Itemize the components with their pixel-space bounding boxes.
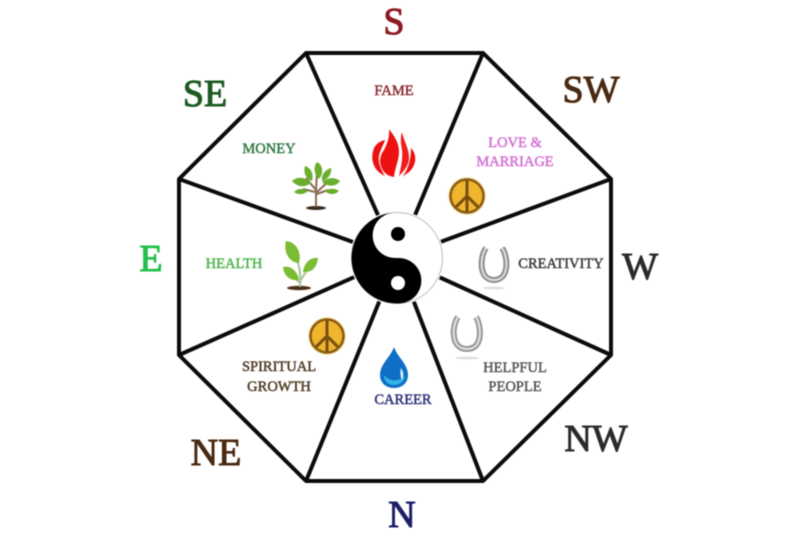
direction label: NW: NW (564, 418, 628, 460)
panel label: spiritual growth: GROWTH (247, 379, 311, 395)
panel label: helpful people: PEOPLE (488, 379, 542, 395)
yin yang symbol (348, 211, 444, 307)
panel label: love and marriage (476, 135, 554, 170)
icon: horseshoe right (482, 248, 506, 289)
direction label: W: W (622, 246, 658, 288)
direction label: E: E (139, 238, 163, 280)
direction label: SW: SW (562, 69, 620, 111)
direction label: SE: SE (183, 73, 227, 115)
icon: peace sign lower (308, 317, 346, 355)
panel label: spiritual growth (242, 359, 316, 395)
panel label: spiritual growth: SPIRITUAL (242, 359, 316, 375)
panel label: love and marriage: MARRIAGE (476, 154, 554, 170)
direction label: S: S (383, 1, 405, 43)
panel label: money: MONEY (242, 141, 296, 157)
panel label: fame: FAME (374, 83, 414, 99)
icon: horseshoe lower (454, 317, 480, 359)
icon: water drop (380, 347, 408, 388)
icon: flame (372, 129, 415, 177)
panel label: career: CAREER (374, 392, 432, 408)
panel label: health: HEALTH (206, 256, 263, 272)
panel label: creativity: CREATIVITY (518, 256, 604, 272)
bagua octagon frame (179, 53, 611, 481)
direction label: NE: NE (191, 432, 241, 474)
panel label: love and marriage: LOVE & (488, 135, 543, 151)
panel label: helpful people: HELPFUL (483, 360, 547, 376)
icon: sprout (283, 241, 318, 290)
panel label: helpful people (483, 360, 547, 395)
icon: peace sign top (448, 177, 486, 215)
icon: tree (292, 162, 340, 210)
